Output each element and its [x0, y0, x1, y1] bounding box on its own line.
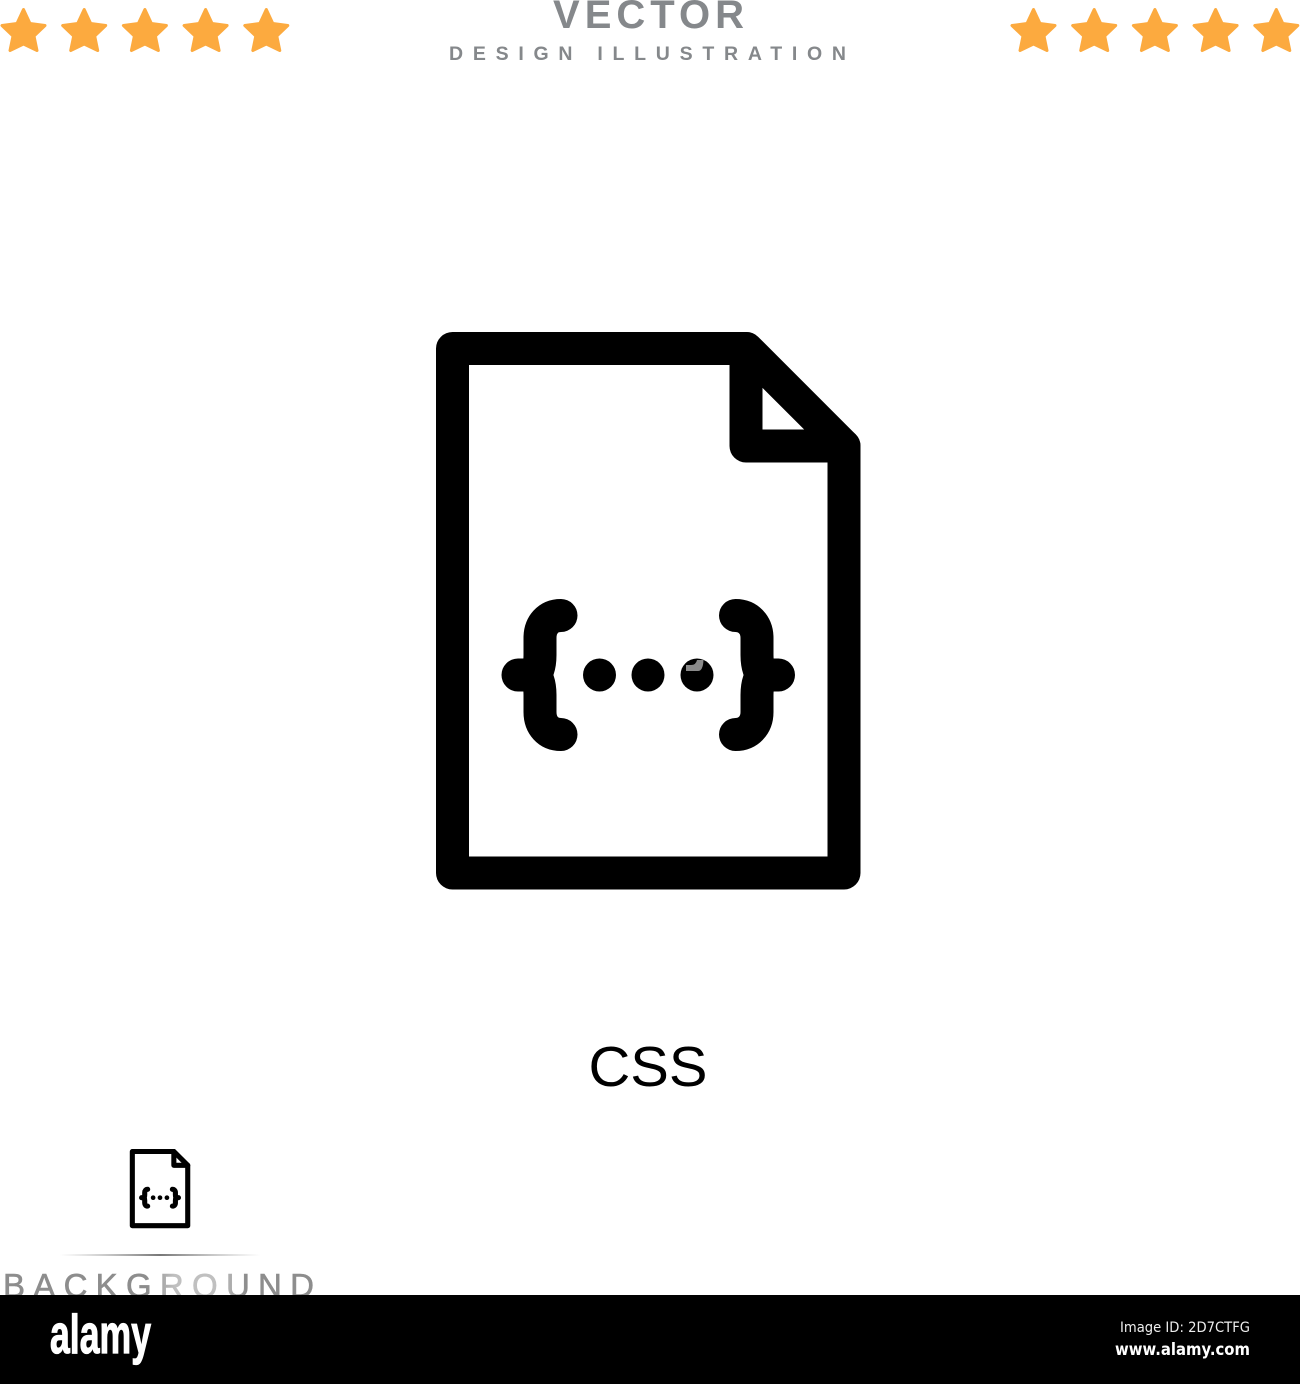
left star rating: [2, 10, 288, 50]
watermark speck on third dot: [686, 660, 704, 671]
footer band: [0, 1295, 1300, 1384]
subheading: DESIGN ILLUSTRATION: DESIGN ILLUSTRATION: [449, 43, 846, 65]
divider line under small icon: [60, 1254, 260, 1256]
right star rating: [1012, 10, 1298, 50]
website: www.alamy.com: [1115, 1340, 1250, 1359]
label: CSS: CSS: [588, 1035, 708, 1098]
right curly brace: [736, 616, 778, 734]
folded corner: [746, 348, 844, 446]
icon: CSS file, large: [452, 348, 844, 873]
icon: CSS file, small: [132, 1152, 188, 1226]
left curly brace: [518, 616, 561, 734]
text: BACKGROUND: BACKGROUND: [3, 1267, 314, 1304]
three dots: [583, 658, 714, 692]
logo: alamy: alamy: [50, 1303, 151, 1365]
file outline: [452, 348, 844, 873]
image id: Image ID: 2D7CTFG: [1120, 1320, 1250, 1336]
